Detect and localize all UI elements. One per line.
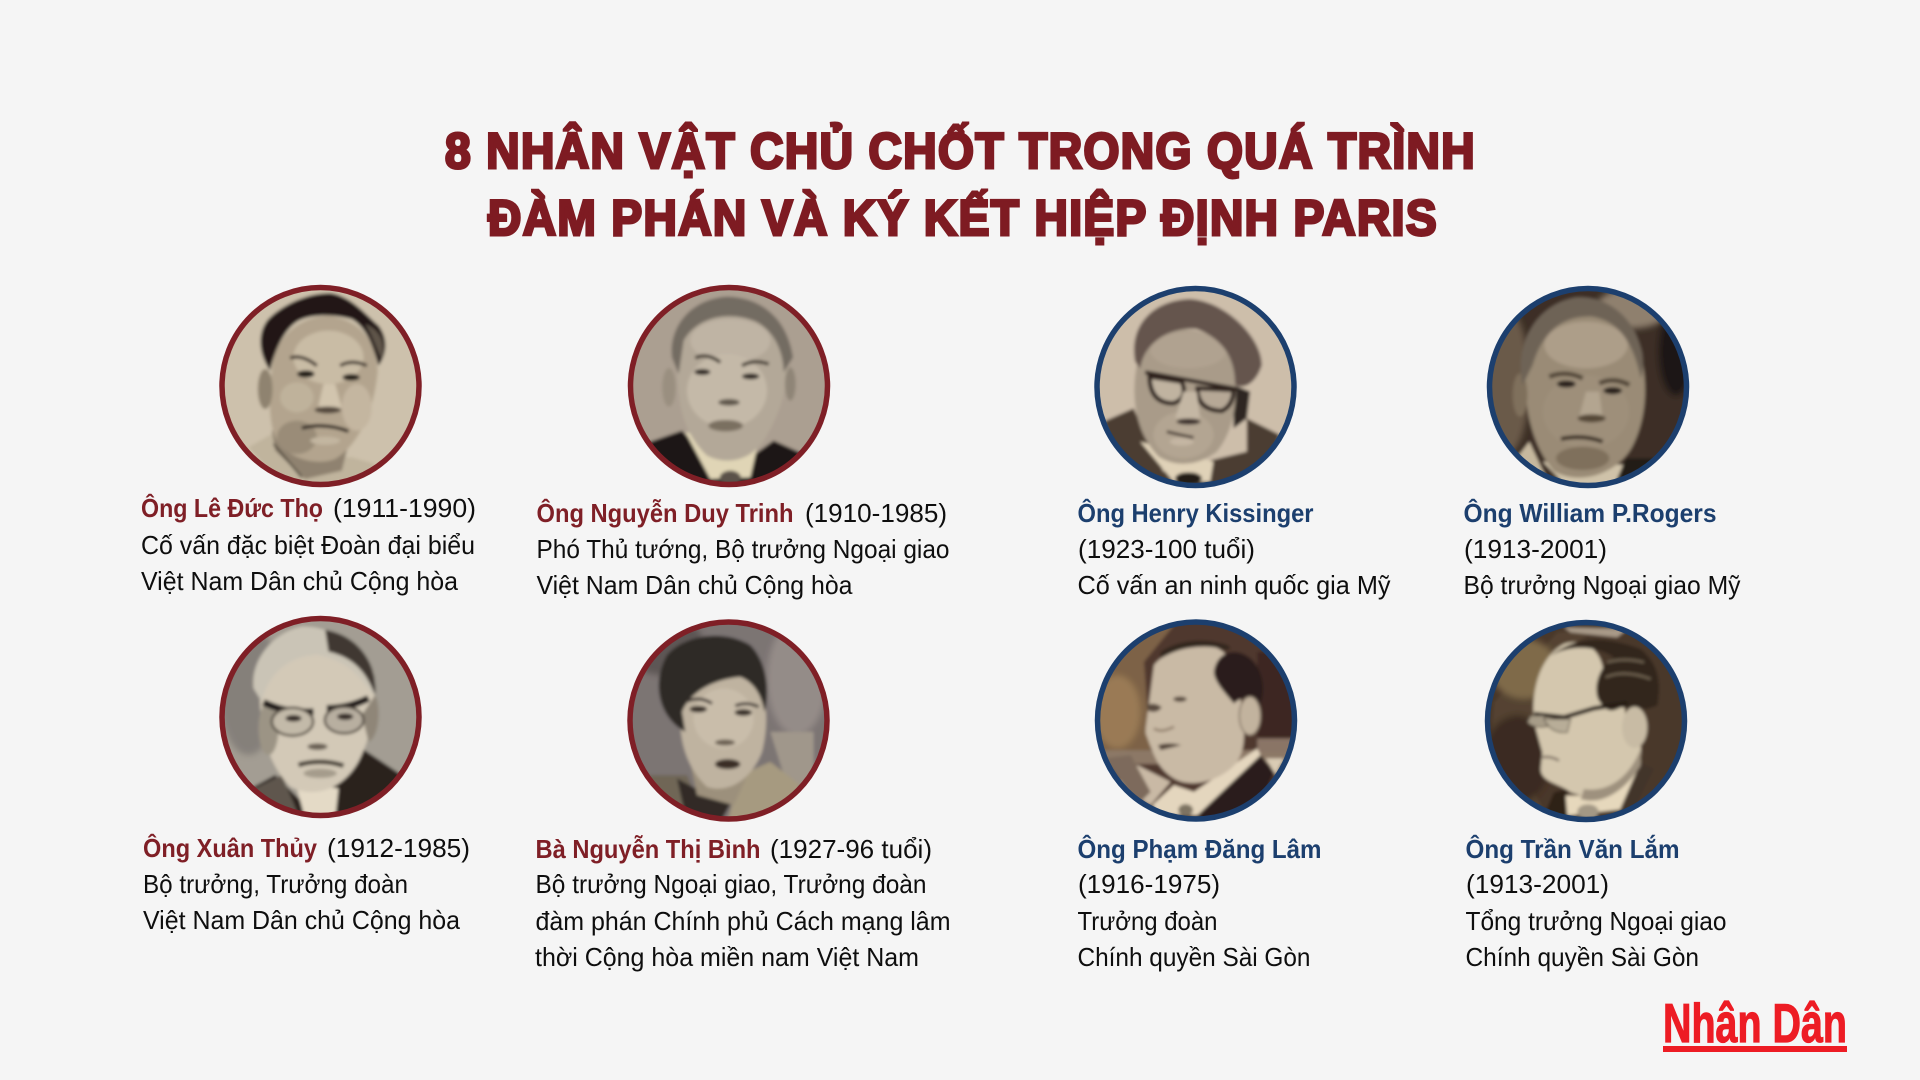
name and role text: Ông William P.Rogers (1464, 498, 1716, 528)
name and role text: Bộ trưởng Ngoại giao Mỹ (1464, 570, 1740, 600)
portrait: William P. Rogers (1483, 285, 1693, 492)
name and role text: Cố vấn an ninh quốc gia Mỹ (1078, 570, 1390, 600)
title (445, 122, 1476, 246)
name and role text: Cố vấn đặc biệt Đoàn đại biểu (141, 530, 475, 560)
portrait: Nguyễn Thị Bình (624, 615, 831, 822)
logo: Nhân Dân: Nhân Dân (1663, 992, 1847, 1054)
name and role text (535, 834, 950, 972)
name and role text: Bà Nguyễn Thị Bình (536, 834, 760, 864)
name and role text (141, 493, 476, 596)
name and role text: Ông Nguyễn Duy Trinh (536, 498, 794, 528)
name and role text (1078, 834, 1322, 972)
portrait: Henry Kissinger (1094, 285, 1297, 489)
name and role text: (1912-1985) (327, 833, 470, 863)
portrait: Xuân Thủy (218, 615, 422, 819)
name and role text: (1913-2001) (1464, 534, 1607, 564)
name and role text (143, 833, 470, 935)
name and role text: Việt Nam Dân chủ Cộng hòa (536, 570, 853, 600)
portrait: Phạm Đăng Lâm (1094, 618, 1298, 822)
person card: Phạm Đăng Lâm (1078, 618, 1322, 972)
name and role text: Ông Henry Kissinger (1078, 498, 1314, 528)
title: 8 NHÂN VẬT CHỦ CHỐT TRONG QUÁ TRÌNH (445, 122, 1476, 179)
infographic canvas (141, 121, 1847, 1052)
name and role text (1078, 498, 1390, 600)
name and role text: Bộ trưởng, Trưởng đoàn (143, 869, 408, 899)
name and role text (1466, 834, 1726, 972)
name and role text: Trưởng đoàn (1078, 906, 1218, 936)
person card: Trần Văn Lắm (1466, 619, 1726, 972)
title: ĐÀM PHÁN VÀ KÝ KẾT HIỆP ĐỊNH PARIS (488, 190, 1438, 246)
portrait: Nguyễn Duy Trinh (627, 284, 831, 488)
person card: William P. Rogers (1464, 285, 1740, 600)
name and role text: Việt Nam Dân chủ Cộng hòa (141, 566, 459, 596)
person card: Xuân Thủy (143, 615, 470, 935)
name and role text: Ông Trần Văn Lắm (1466, 834, 1680, 864)
name and role text: (1910-1985) (805, 498, 947, 528)
portrait: Trần Văn Lắm (1484, 619, 1688, 823)
person card: Nguyễn Thị Bình (535, 615, 950, 972)
name and role text: Chính quyền Sài Gòn (1466, 942, 1699, 972)
name and role text: Ông Xuân Thủy (143, 833, 317, 863)
name and role text: (1916-1975) (1078, 869, 1220, 899)
name and role text: Việt Nam Dân chủ Cộng hòa (143, 905, 461, 935)
name and role text: (1927-96 tuổi) (770, 834, 932, 864)
name and role text: Ông Lê Đức Thọ (141, 493, 323, 523)
name and role text: Bộ trưởng Ngoại giao, Trưởng đoàn (536, 869, 926, 899)
name and role text: thời Cộng hòa miền nam Việt Nam (535, 942, 919, 972)
name and role text: (1913-2001) (1466, 869, 1609, 899)
name and role text: Phó Thủ tướng, Bộ trưởng Ngoại giao (536, 534, 950, 564)
portrait: Lê Đức Thọ (218, 284, 422, 488)
name and role text (1464, 498, 1740, 600)
name and role text: Ông Phạm Đăng Lâm (1078, 834, 1322, 864)
name and role text: (1911-1990) (333, 493, 476, 523)
person card: Henry Kissinger (1078, 285, 1390, 600)
name and role text: (1923-100 tuổi) (1078, 534, 1255, 564)
person card: Lê Đức Thọ (141, 284, 476, 596)
name and role text: Tổng trưởng Ngoại giao (1466, 906, 1726, 936)
name and role text: đàm phán Chính phủ Cách mạng lâm (536, 906, 950, 936)
person card: Nguyễn Duy Trinh (536, 284, 950, 600)
name and role text (536, 498, 950, 600)
name and role text: Chính quyền Sài Gòn (1078, 942, 1310, 972)
